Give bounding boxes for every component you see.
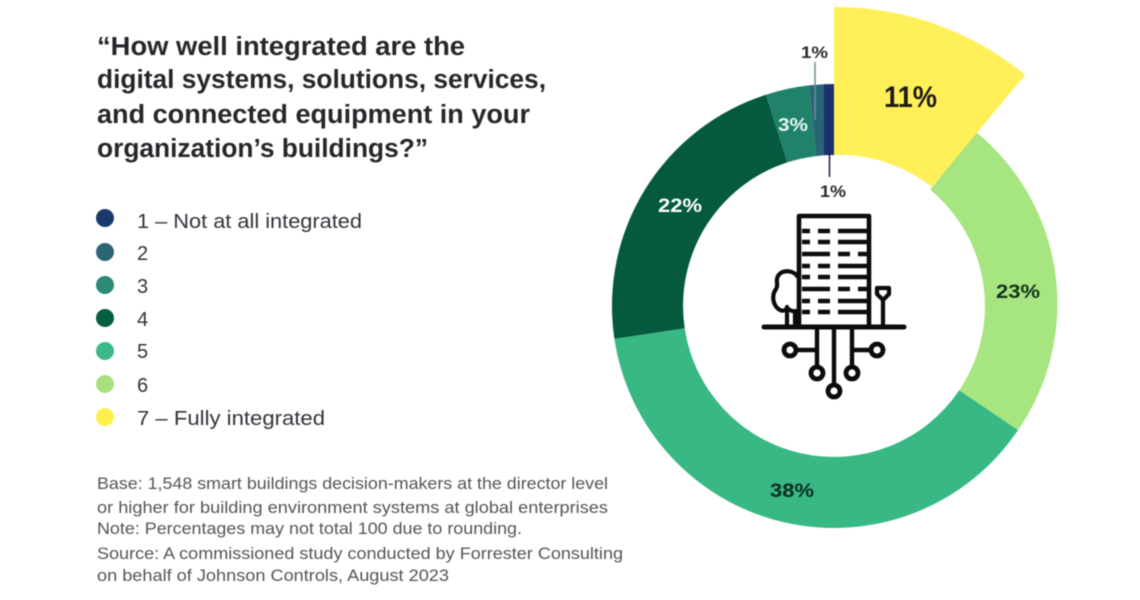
footnote: base, note and source: or higher for building environment systems at global enterprises (97, 499, 608, 517)
legend item 3 (96, 276, 148, 298)
ground line (764, 324, 904, 330)
legend item 2: 2 (137, 243, 148, 265)
legend (96, 209, 362, 430)
footnote: base, note and source: Base: 1,548 smart buildings decision-makers at the director level (97, 475, 608, 493)
legend item 4: 4 (137, 309, 148, 331)
footnote: base, note and source: Note: Percentages may not total 100 due to rounding. (97, 520, 522, 538)
street lamp (877, 288, 889, 326)
leader line: top 1% (814, 62, 816, 120)
circuit nodes (784, 344, 883, 397)
leader line: bottom 1% (828, 153, 830, 177)
segment 4: 22% (612, 95, 787, 339)
legend item 6: 6 (137, 375, 148, 397)
title: organization’s buildings?” (97, 135, 428, 163)
value label 22%: 22% (658, 196, 702, 217)
title (97, 33, 546, 163)
value label 38%: 38% (770, 481, 814, 502)
building windows (802, 231, 867, 312)
legend item 7: 7 – Fully integrated (137, 408, 325, 430)
title: digital systems, solutions, services, (97, 66, 546, 94)
segment 5: 38% (614, 328, 1018, 528)
legend item 1: 1 – Not at all integrated (137, 211, 362, 233)
title: “How well integrated are the (97, 33, 465, 61)
legend item 3: 3 (137, 276, 148, 298)
icon: smart building with circuit roots (764, 216, 904, 397)
value label top 1%: 1% (801, 43, 828, 62)
segment 1: 1% (824, 84, 834, 155)
value label 11%: 11% (884, 81, 937, 114)
segment 3: 3% (766, 85, 816, 162)
legend item 2 (96, 243, 148, 265)
donut chart (612, 7, 1057, 528)
value label bottom 1%: 1% (820, 182, 846, 201)
legend item 6 (96, 375, 148, 397)
legend item 4 (96, 309, 148, 331)
tree (773, 271, 798, 327)
value label 23%: 23% (996, 282, 1040, 303)
circuit lines (797, 327, 870, 383)
building outline (799, 216, 869, 327)
segment 6: 23% (930, 132, 1057, 430)
footnote: base, note and source: on behalf of Johnson Controls, August 2023 (97, 567, 449, 585)
legend item 5 (96, 341, 148, 363)
footnote: base, note and source (97, 475, 623, 585)
title: and connected equipment in your (97, 101, 530, 129)
legend item 5: 5 (137, 341, 148, 363)
segment 7: 11% (exploded) (834, 7, 1025, 187)
value label 3%: 3% (778, 115, 808, 135)
segment 2: 1% (809, 84, 824, 156)
footnote: base, note and source: Source: A commissioned study conducted by Forrester Consulting (97, 545, 623, 563)
